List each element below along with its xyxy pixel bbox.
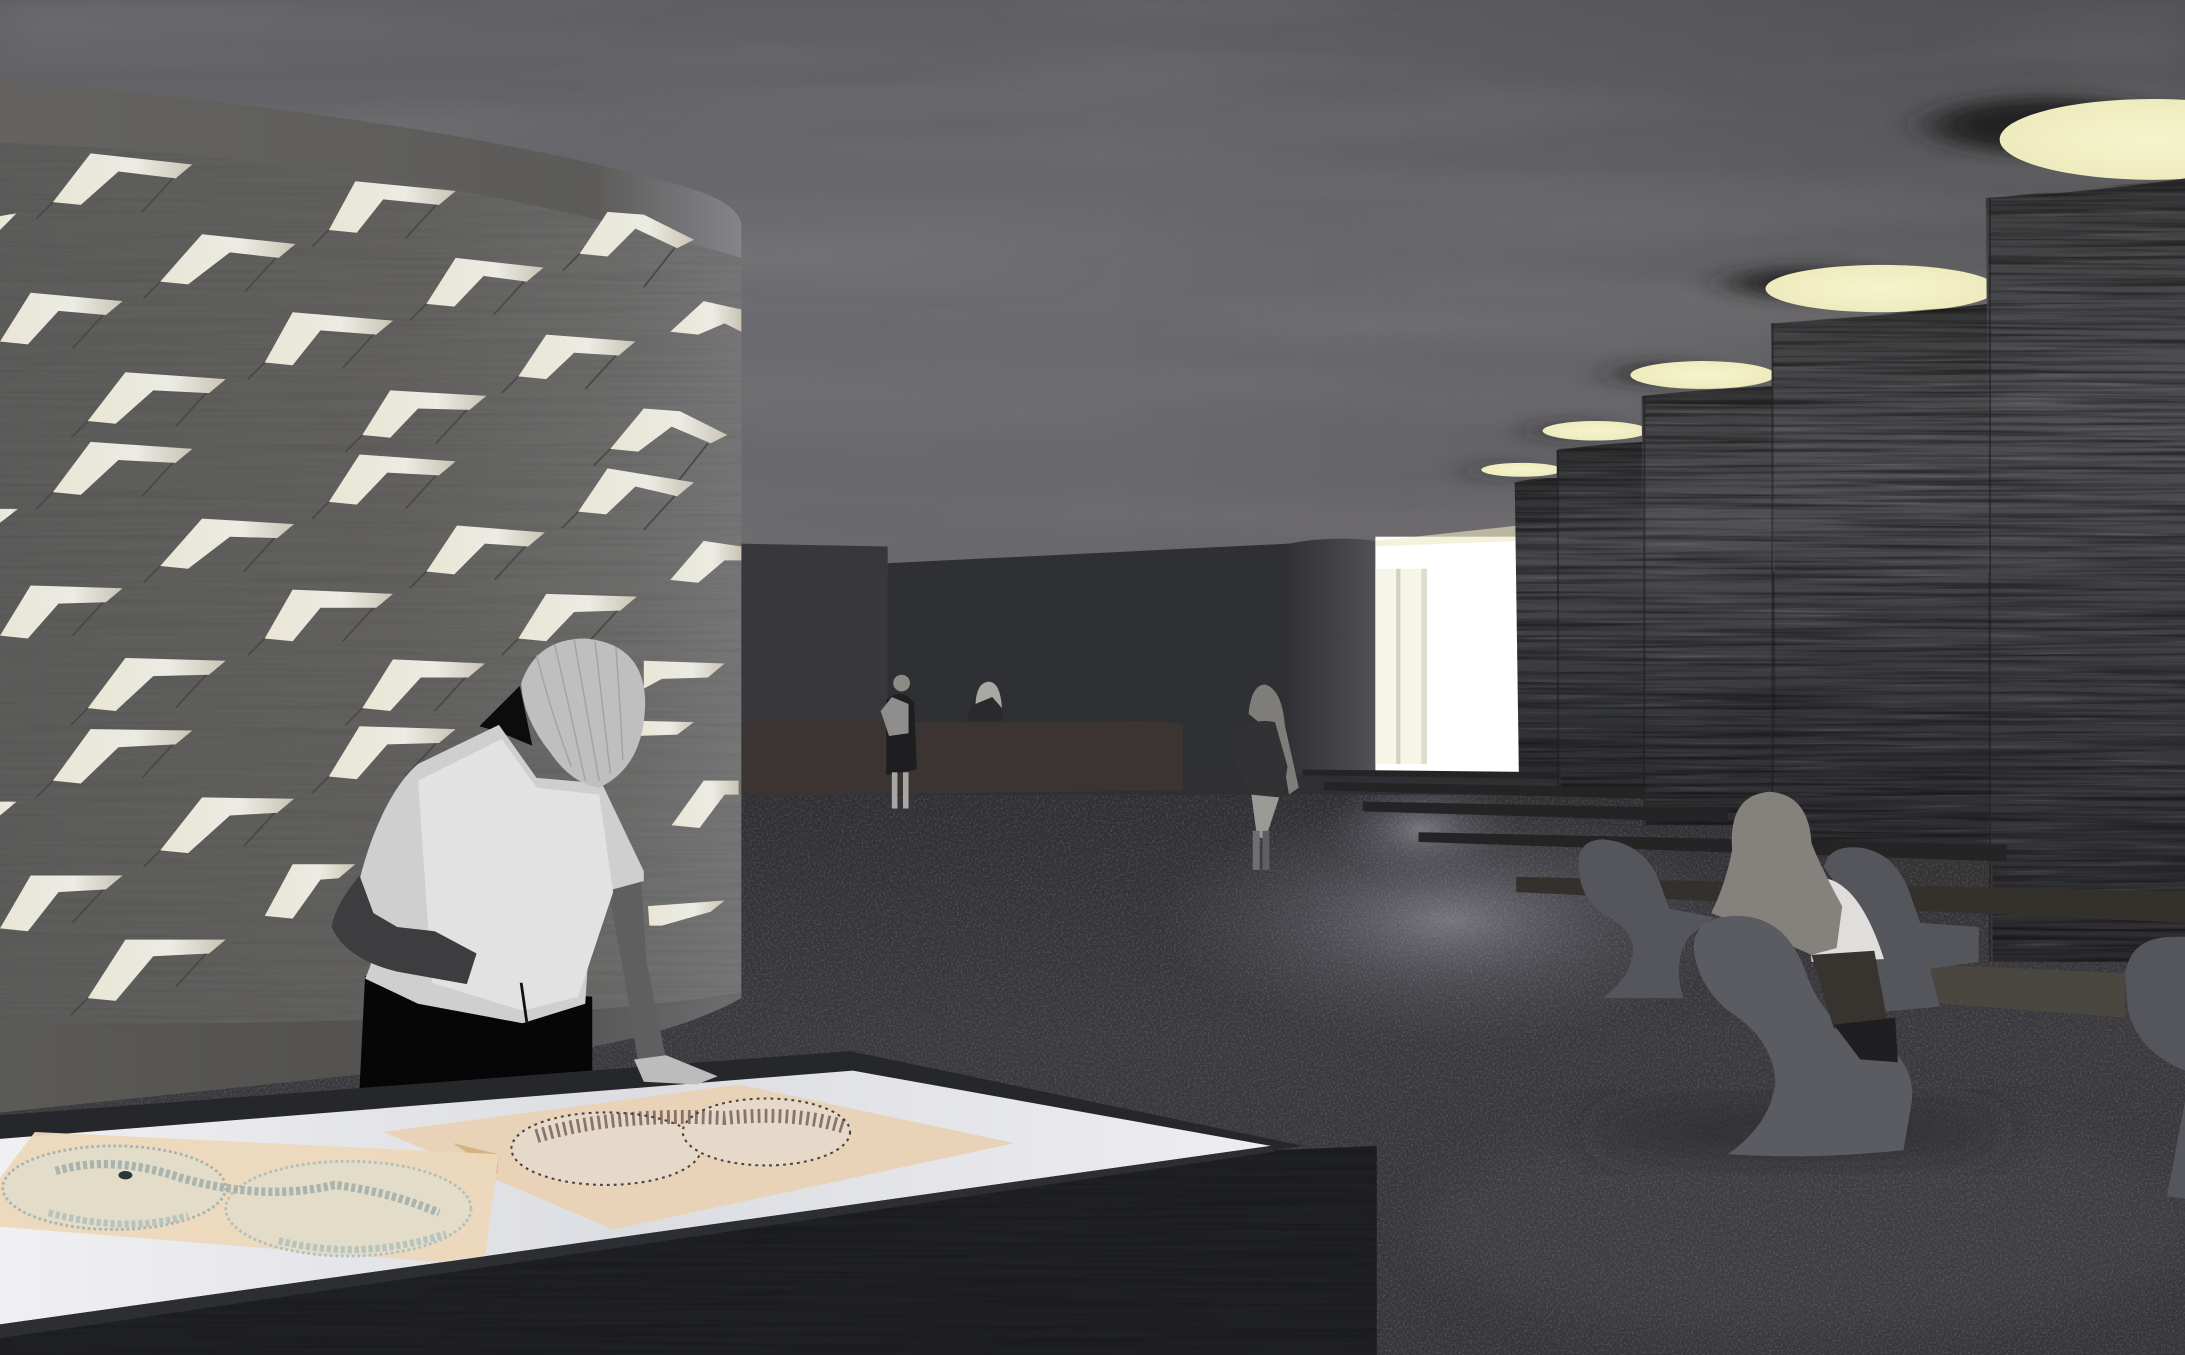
- reception desk: [741, 721, 1183, 796]
- back wall and reception: [741, 526, 1519, 796]
- wall top band: [0, 79, 741, 258]
- table frame: [0, 1051, 1303, 1345]
- distant standing figure with child: [881, 675, 917, 809]
- light slots: [0, 153, 741, 1001]
- wall base band: [0, 993, 741, 1112]
- map sheet: left: [0, 1132, 499, 1266]
- chair shadow: [1589, 1112, 2007, 1151]
- pants: [360, 976, 592, 1089]
- table body: [0, 1146, 1377, 1355]
- white shirt: [354, 725, 644, 1023]
- skylight shadows: [1473, 98, 2167, 475]
- floor: [0, 767, 2185, 1355]
- bright window: [1375, 526, 1519, 774]
- map sheet: right: [383, 1085, 1014, 1230]
- walking woman: [1232, 684, 1299, 870]
- panel seams: [36, 178, 708, 1015]
- benches: [1303, 770, 2185, 1018]
- person leaning over table: [332, 638, 666, 1089]
- left arm: [332, 875, 477, 984]
- hand on table edge: [634, 1055, 718, 1085]
- lit glass top: [0, 1071, 1271, 1324]
- right arm: [608, 878, 666, 1062]
- seated woman lower body: [1812, 951, 1898, 1062]
- distant figure at desk: [967, 682, 1003, 721]
- curved perforated wall: [0, 79, 741, 1112]
- stone columns: [1515, 178, 2185, 976]
- ceiling: [0, 0, 2185, 572]
- back chairs: [1578, 839, 2185, 1199]
- display table: [0, 1051, 1380, 1355]
- circular skylights: [1481, 99, 2185, 477]
- knit hat: [521, 638, 645, 788]
- front chair: [1694, 916, 1912, 1156]
- round pillar: [1289, 539, 1375, 775]
- black hair: [479, 686, 532, 746]
- seated woman hair and shirt: [1711, 792, 1884, 962]
